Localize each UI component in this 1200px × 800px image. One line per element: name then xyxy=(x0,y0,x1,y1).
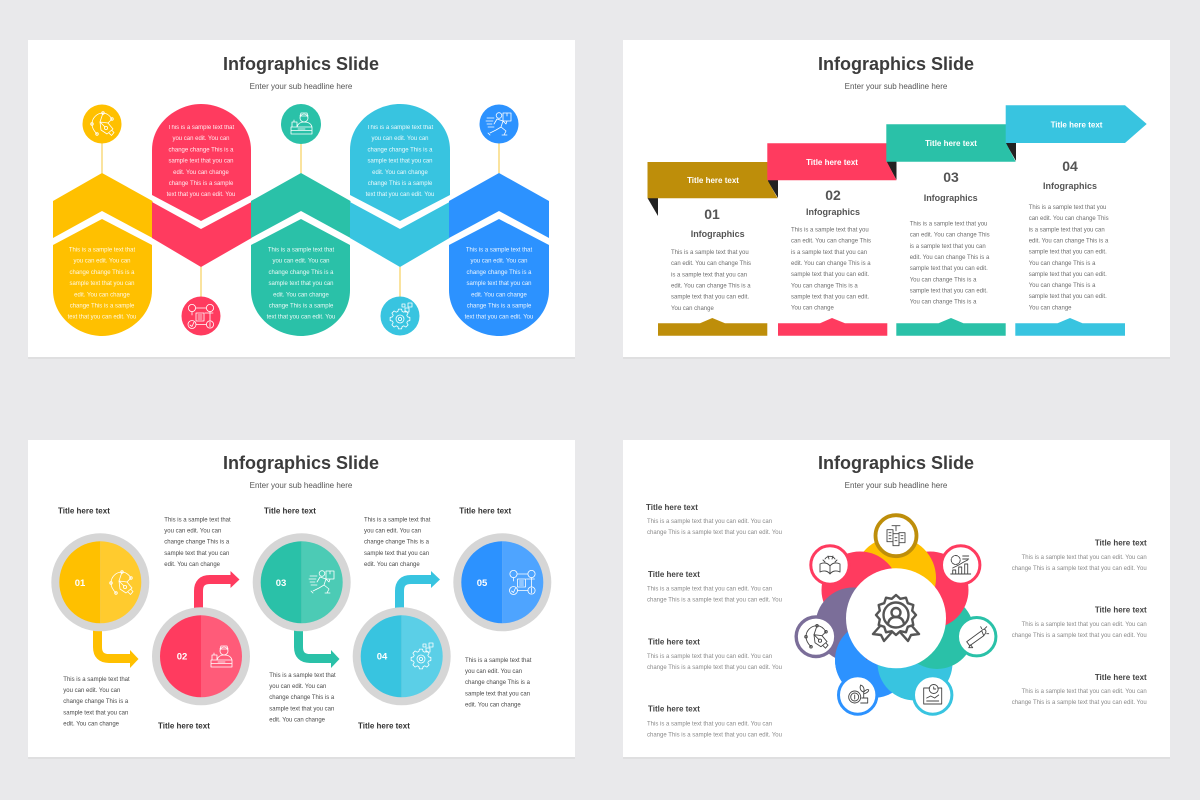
column 02: can edit. You can change This xyxy=(791,239,871,245)
column 01: edit. You can change This is a xyxy=(671,283,751,289)
card: red: text that you can edit. You xyxy=(167,192,235,198)
card: red: edit. You can change xyxy=(173,170,230,176)
card: red: you can edit. You can xyxy=(172,136,230,142)
arrow: yellow xyxy=(98,625,138,668)
step 05: 05 xyxy=(477,578,488,589)
subtitle: Enter your sub headline here xyxy=(250,82,353,91)
labels and descriptions: you can edit. You can xyxy=(63,688,120,694)
column 04: You can change xyxy=(1029,305,1072,311)
column 01: Infographics xyxy=(691,229,745,239)
column 04: sample text that you can edit. xyxy=(1029,294,1107,300)
ribbon 01 xyxy=(648,162,778,198)
card: teal: change This is a sample xyxy=(269,304,334,310)
labels and descriptions: change change This is a xyxy=(364,540,430,546)
card: teal: sample text that you can xyxy=(268,281,334,287)
title: Infographics Slide xyxy=(223,453,379,473)
labels and descriptions: Title here text xyxy=(58,506,110,516)
labels and descriptions: This is a sample text that xyxy=(269,673,336,679)
ribbon folds xyxy=(648,142,1016,216)
right text blocks: This is a sample text that you can edit. You can xyxy=(1022,622,1147,628)
chevron band xyxy=(53,173,549,267)
subtitle: Enter your sub headline here xyxy=(845,82,948,91)
card: yellow: text that you can edit. You xyxy=(68,315,136,321)
card: cyan: edit. You can change xyxy=(372,170,429,176)
column 03: Infographics xyxy=(924,193,978,203)
column 03: You can change This is a xyxy=(910,277,977,283)
column 03: edit. You can change This is a xyxy=(910,255,990,261)
card: yellow xyxy=(53,219,152,336)
icon: central badge xyxy=(873,595,919,641)
card: cyan: sample text that you can xyxy=(367,159,433,165)
icon: worker xyxy=(281,104,321,144)
labels and descriptions: sample text that you can xyxy=(164,551,229,557)
icon: red ring, bar chart xyxy=(942,546,980,584)
column 03: 03 xyxy=(943,169,959,185)
left text blocks: change This is a sample text that you can edit. You xyxy=(647,732,782,738)
card: cyan: text that you can edit. You xyxy=(366,192,434,198)
left text blocks: This is a sample text that you can edit. You can xyxy=(647,587,772,593)
labels and descriptions: Title here text xyxy=(158,722,210,730)
column 04: This is a sample text that you xyxy=(1029,205,1106,211)
icon: red ring, open book xyxy=(811,546,849,584)
ribbon 04 xyxy=(1006,105,1147,143)
card: cyan: you can edit. You can xyxy=(371,136,429,142)
arrow: red xyxy=(198,571,240,612)
step 03 xyxy=(253,533,351,631)
ribbon 02: Title here text xyxy=(806,158,858,167)
column 02: You can change xyxy=(791,306,834,312)
column 04: can edit. You can change This xyxy=(1029,216,1109,222)
labels and descriptions: Title here text xyxy=(358,722,410,730)
step 04 xyxy=(353,607,451,705)
column 04: is a sample text that you can xyxy=(1029,227,1105,233)
column 04: You can change This is a xyxy=(1029,283,1096,289)
card: blue: change This is a sample xyxy=(467,304,532,310)
labels and descriptions: Title here text xyxy=(459,506,512,516)
column 03: You can change This is a xyxy=(910,300,977,306)
column 04: Infographics xyxy=(1043,181,1097,191)
card: teal: change change This is a xyxy=(269,270,334,276)
column 04 xyxy=(1015,158,1125,336)
icon: purple ring, pen tool xyxy=(796,617,836,656)
labels and descriptions: sample text that you can xyxy=(269,706,334,712)
labels and descriptions: change change This is a xyxy=(63,699,129,705)
card: teal: This is a sample text that xyxy=(268,248,335,254)
left text blocks: Title here text xyxy=(648,570,700,579)
card: blue: you can edit. You can xyxy=(470,259,528,265)
panel: hexagon chevrons slide xyxy=(28,40,575,359)
column 02 xyxy=(778,187,887,336)
column 01: can edit. You can change This xyxy=(671,261,751,267)
step 04: 04 xyxy=(377,652,388,662)
labels and descriptions: edit. You can change xyxy=(364,562,420,568)
card: red: change change This is a xyxy=(169,147,234,153)
icon: teal ring, megaphone xyxy=(958,618,996,656)
card: red: change This is a sample xyxy=(169,181,234,187)
card: blue xyxy=(449,219,549,336)
left text blocks: Title here text xyxy=(646,503,698,512)
card: red: This is a sample text that xyxy=(168,125,235,131)
column 02: sample text that you can edit. xyxy=(791,294,869,300)
column 03: can edit. You can change This xyxy=(910,233,990,239)
step 02: 02 xyxy=(177,652,187,662)
ribbon 04: Title here text xyxy=(1051,120,1103,130)
card: yellow: change This is a sample xyxy=(70,304,135,310)
labels and descriptions xyxy=(58,506,532,730)
column 03: sample text that you can edit. xyxy=(910,266,988,272)
right text blocks: Title here text xyxy=(1095,539,1147,548)
column 03 xyxy=(896,169,1006,336)
card: cyan xyxy=(350,104,450,221)
left text blocks: This is a sample text that you can edit. You can xyxy=(647,722,772,728)
ribbon 02 xyxy=(767,143,896,180)
subtitle: Enter your sub headline here xyxy=(250,481,353,490)
right text blocks: change This is a sample text that you can edit. You xyxy=(1012,700,1147,706)
right text blocks: This is a sample text that you can edit. You can xyxy=(1022,555,1147,561)
card: teal xyxy=(251,219,350,336)
petal ring xyxy=(816,537,974,700)
column 01: This is a sample text that you xyxy=(671,250,749,256)
right text blocks: Title here text xyxy=(1095,673,1147,682)
labels and descriptions: This is a sample text that xyxy=(164,518,231,524)
card: yellow: edit. You can change xyxy=(74,292,131,298)
column 04: edit. You can change This is a xyxy=(1029,238,1109,244)
connector lines xyxy=(102,143,499,297)
title: Infographics Slide xyxy=(223,54,379,74)
labels and descriptions: you can edit. You can xyxy=(164,529,221,535)
left text blocks: Title here text xyxy=(648,705,700,714)
labels and descriptions: This is a sample text that xyxy=(465,658,532,664)
panel: circle process slide xyxy=(28,440,575,759)
column 02: Infographics xyxy=(806,207,860,217)
left text blocks xyxy=(646,503,782,738)
right text blocks: This is a sample text that you can edit. You can xyxy=(1022,689,1147,695)
arrow: teal xyxy=(298,625,340,668)
card: blue: edit. You can change xyxy=(471,292,528,298)
column 01: is a sample text that you can xyxy=(671,272,747,278)
column 02: sample text that you can edit. xyxy=(791,272,869,278)
card: teal: you can edit. You can xyxy=(272,259,330,265)
ribbon 03: Title here text xyxy=(925,139,977,148)
labels and descriptions: you can edit. You can xyxy=(269,684,326,690)
left text blocks: change This is a sample text that you can edit. You xyxy=(647,665,782,671)
column 03: is a sample text that you can xyxy=(910,244,986,250)
right text blocks: change This is a sample text that you can edit. You xyxy=(1012,566,1147,572)
left text blocks: Title here text xyxy=(648,637,700,646)
icon: runner xyxy=(480,104,518,144)
card: yellow: sample text that you can xyxy=(69,281,135,287)
icon: pen tool xyxy=(82,104,122,144)
panel: staircase ribbons slide xyxy=(623,40,1170,359)
card: yellow: This is a sample text that xyxy=(69,248,136,254)
labels and descriptions: change change This is a xyxy=(269,695,335,701)
labels and descriptions: change change This is a xyxy=(164,540,230,546)
column 01: 01 xyxy=(704,206,720,222)
column 01 xyxy=(658,206,767,336)
card: cyan: change change This is a xyxy=(368,147,433,153)
card: blue: text that you can edit. You xyxy=(465,315,533,321)
column 04: sample text that you can edit. xyxy=(1029,272,1107,278)
labels and descriptions: edit. You can change xyxy=(465,702,521,708)
column 01: sample text that you can edit. xyxy=(671,295,749,301)
icon: cyan ring, dashboard xyxy=(914,676,952,714)
right text blocks: change This is a sample text that you can edit. You xyxy=(1012,633,1147,639)
card: blue: This is a sample text that xyxy=(466,248,533,254)
column 01: You can change xyxy=(671,306,714,312)
panel: radial petals slide xyxy=(623,440,1170,759)
left text blocks: change This is a sample text that you can edit. You xyxy=(647,598,782,604)
ribbon 03 xyxy=(886,124,1016,162)
title: Infographics Slide xyxy=(818,453,974,473)
icon: network xyxy=(182,296,220,336)
card: red: sample text that you can xyxy=(168,159,234,165)
step 03: 03 xyxy=(276,578,286,589)
left text blocks: This is a sample text that you can edit. You can xyxy=(647,654,772,660)
arrow: cyan xyxy=(400,571,440,612)
title: Infographics Slide xyxy=(818,54,974,74)
column 02: edit. You can change This is a xyxy=(791,261,871,267)
card: blue: change change This is a xyxy=(467,270,532,276)
labels and descriptions: This is a sample text that xyxy=(364,518,431,524)
step 05 xyxy=(453,533,551,631)
labels and descriptions: edit. You can change xyxy=(164,562,221,568)
left text blocks: This is a sample text that you can edit. You can xyxy=(647,519,772,525)
column 03: sample text that you can edit. xyxy=(910,288,988,294)
labels and descriptions: sample text that you can xyxy=(63,710,128,716)
labels and descriptions: sample text that you can xyxy=(465,691,530,697)
card: teal: edit. You can change xyxy=(273,292,330,298)
column 02: You can change This is a xyxy=(791,283,858,289)
labels and descriptions: This is a sample text that xyxy=(63,677,130,683)
column 02: 02 xyxy=(825,187,841,203)
ribbon 01: Title here text xyxy=(687,176,739,185)
right text blocks: Title here text xyxy=(1095,606,1147,615)
card: yellow: you can edit. You can xyxy=(73,259,131,265)
card: cyan: This is a sample text that xyxy=(367,125,434,131)
labels and descriptions: Title here text xyxy=(264,506,316,516)
column 02: is a sample text that you can xyxy=(791,250,867,256)
icon: gear xyxy=(380,296,420,336)
labels and descriptions: you can edit. You can xyxy=(364,529,421,535)
labels and descriptions: sample text that you can xyxy=(364,551,429,557)
column 04: 04 xyxy=(1062,158,1078,174)
labels and descriptions: edit. You can change xyxy=(269,717,326,723)
card: red xyxy=(152,104,251,221)
card: blue: sample text that you can xyxy=(466,281,532,287)
labels and descriptions: change change This is a xyxy=(465,680,531,686)
column 02: This is a sample text that you xyxy=(791,228,869,234)
icon: blue ring, coin and plant xyxy=(838,676,877,714)
labels and descriptions: you can edit. You can xyxy=(465,669,522,675)
right text blocks xyxy=(1012,539,1147,706)
column 04: sample text that you can edit. xyxy=(1029,250,1107,256)
card: yellow: change change This is a xyxy=(70,270,135,276)
step 02 xyxy=(152,607,250,705)
card: cyan: change This is a sample xyxy=(368,181,433,187)
labels and descriptions: edit. You can change xyxy=(63,721,120,727)
left text blocks: change This is a sample text that you can edit. You xyxy=(647,530,782,536)
step 01 xyxy=(51,533,149,631)
column 04: You can change This is a xyxy=(1029,261,1096,267)
step 01: 01 xyxy=(75,578,86,589)
icon: mustard ring, documents xyxy=(876,515,916,556)
card: teal: text that you can edit. You xyxy=(267,315,335,321)
column 03: This is a sample text that you xyxy=(910,222,987,228)
subtitle: Enter your sub headline here xyxy=(845,481,948,490)
